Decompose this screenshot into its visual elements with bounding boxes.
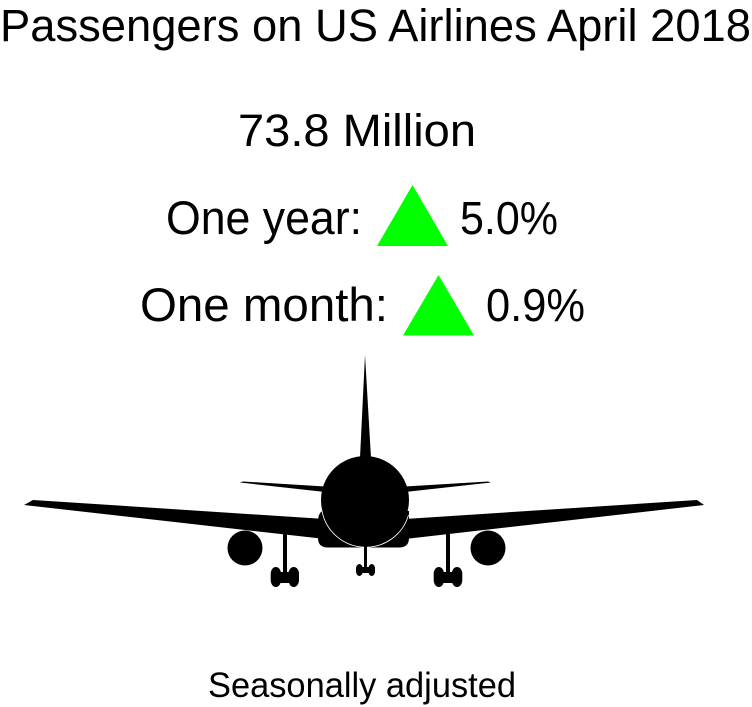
footnote: Seasonally adjusted	[208, 666, 516, 705]
one year label: One year:	[166, 191, 362, 244]
one year value: 5.0%	[460, 192, 558, 244]
icon: green up triangle, one year	[377, 185, 448, 246]
left engine	[228, 530, 262, 566]
one month value: 0.9%	[486, 279, 585, 331]
icon: green up triangle, one month	[403, 275, 474, 336]
one month row	[140, 275, 585, 336]
nose landing gear	[356, 546, 375, 576]
title: Passengers on US Airlines April 2018	[0, 0, 751, 51]
right wing	[405, 500, 704, 539]
fuselage	[321, 456, 409, 544]
left landing gear	[271, 534, 299, 587]
right tailplane	[405, 482, 491, 492]
fuselage highlight	[322, 511, 408, 547]
one month label: One month:	[140, 278, 388, 331]
right landing gear	[434, 534, 462, 587]
right engine	[470, 530, 506, 566]
lower fuselage	[318, 511, 409, 548]
one year row	[166, 185, 558, 246]
icon: airplane front view	[24, 355, 704, 587]
left tailplane	[240, 482, 325, 492]
total passengers figure: 73.8 Million	[238, 105, 476, 156]
tail fin	[360, 355, 371, 458]
left wing	[24, 500, 325, 539]
